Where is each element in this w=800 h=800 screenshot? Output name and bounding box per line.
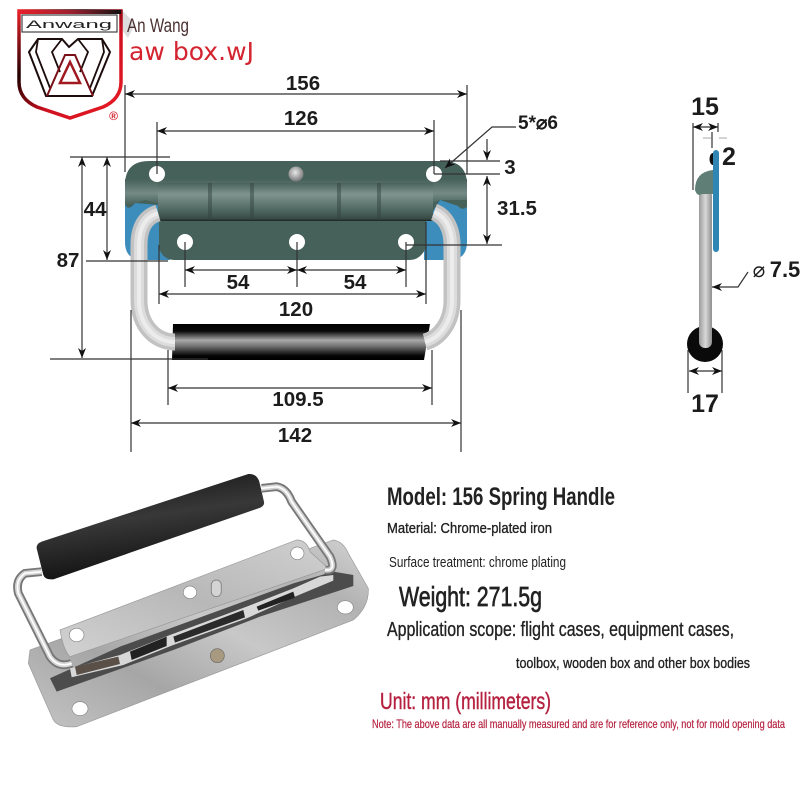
dimension labels: 120 [279,298,313,321]
dimension lines [50,85,516,452]
side grip circle [687,326,723,362]
hinge roll [50,572,353,692]
unit: Unit: mm (millimeters) [380,688,551,714]
side dimension labels: ⌀ [753,259,765,282]
material: Material: Chrome-plated iron [387,520,552,537]
application scope continued: toolbox, wooden box and other box bodies [516,655,750,672]
dimension labels [57,72,558,447]
hinge band [158,183,433,221]
logo: Anwang shield: Anwang [26,19,112,31]
side dimension labels: 15 [691,93,719,121]
side dimension labels [691,93,800,418]
dimension labels: 109.5 [272,388,324,411]
dimension labels: 5*⌀6 [518,113,558,134]
dimension labels: 126 [284,107,318,130]
dimension labels: 3 [504,156,516,179]
handle plate with blue recesses [125,161,467,260]
dimension labels: 44 [84,198,107,221]
dimension labels: 54 [344,271,367,294]
wire handle frame [17,487,332,665]
black rubber grip [172,324,430,360]
mounting holes and rivet [149,166,442,250]
side dimension labels: 17 [691,390,719,418]
back plate [28,540,368,727]
surface treatment: Surface treatment: chrome plating [389,554,566,571]
technical drawing: side view of handle [687,93,800,418]
dimension labels: 54 [227,271,250,294]
side dome [695,170,713,195]
weight: Weight: 271.5g [399,581,542,612]
shop name: aw box.wJ [129,37,254,66]
logo: Anwang shield: ® [109,109,118,123]
technical drawing: front view of handle [50,72,558,452]
side dimension labels: 2 [722,143,736,171]
chrome tube [139,212,452,342]
brand name: An Wang [127,16,189,37]
product photo: chrome spring handle [17,474,368,727]
logo: Anwang shield [19,10,135,123]
dimension labels: 156 [286,72,320,95]
side dimension lines [688,123,748,393]
dimension labels: 87 [57,249,79,272]
specifications text block [372,483,785,731]
inner plate [60,540,328,657]
side dimension labels: 7.5 [770,257,800,282]
photo holes and rivet [69,547,353,716]
small rivet head [710,153,716,165]
dimension labels: 31.5 [497,197,537,220]
dimension labels: 142 [278,424,312,447]
blue plate [713,150,719,252]
black grip [37,474,264,579]
model: Model: 156 Spring Handle [387,483,615,511]
side tube [699,190,712,348]
